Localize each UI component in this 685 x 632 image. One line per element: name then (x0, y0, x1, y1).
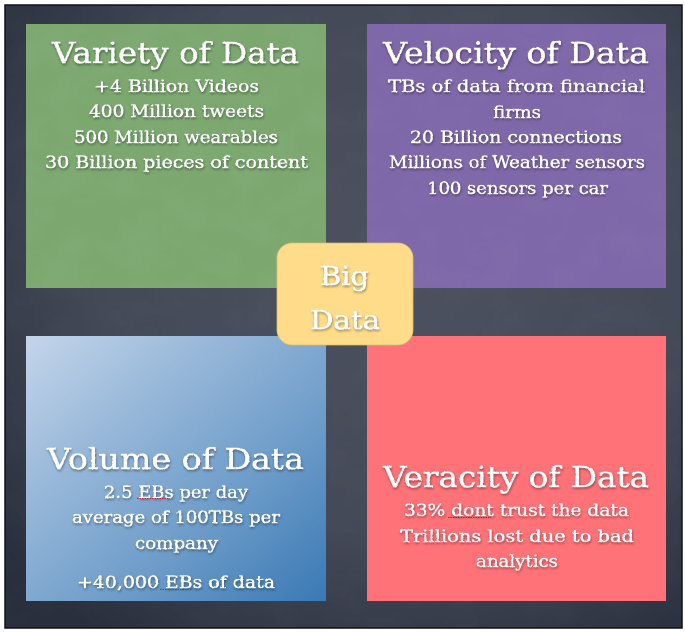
panel: velocity of data (367, 24, 666, 288)
heading: variety: Variety of Data (51, 36, 299, 70)
spellcheck underline: dont (448, 516, 491, 518)
heading: velocity: Velocity of Data (382, 36, 649, 70)
center badge: big data: Data (310, 306, 380, 336)
text block: veracity facts: Trillions lost due to bad (400, 527, 634, 547)
heading: volume: Volume of Data (46, 442, 304, 476)
text block: velocity facts: 20 Billion connections (410, 128, 622, 148)
text block: volume facts: 2.5 EBs per day (104, 483, 248, 503)
text block: veracity facts: analytics (476, 552, 558, 572)
spellcheck underlines: EBs (137, 498, 192, 590)
text block: variety facts: +4 Billion Videos (94, 77, 259, 97)
panel: variety of data (26, 24, 326, 288)
text block: veracity facts: 33% dont trust the data (404, 501, 629, 521)
center badge: big data (277, 243, 413, 345)
text block: variety facts: 400 Million tweets (89, 102, 264, 122)
panel: veracity of data (367, 336, 666, 601)
center badge: big data: Big (320, 262, 369, 292)
text block: velocity facts: 100 sensors per car (427, 179, 609, 199)
text block: velocity facts: firms (493, 103, 541, 123)
heading: veracity: Veracity of Data (382, 460, 649, 494)
text block: velocity facts: Millions of Weather sensors (389, 153, 645, 173)
text block: veracity facts (400, 501, 634, 572)
text block: volume facts (72, 483, 281, 593)
panel: volume of data (26, 336, 326, 601)
text block: variety facts: 500 Million wearables (74, 128, 278, 148)
text block: volume facts: company (135, 534, 218, 554)
text block: volume facts: average of 100TBs per (72, 508, 281, 528)
text block: velocity facts (388, 77, 645, 199)
text block: volume facts: +40,000 EBs of data (77, 573, 275, 593)
text block: variety facts: 30 Billion pieces of content (45, 153, 308, 173)
text block: variety facts (45, 77, 308, 173)
text block: velocity facts: TBs of data from financial (388, 77, 645, 97)
